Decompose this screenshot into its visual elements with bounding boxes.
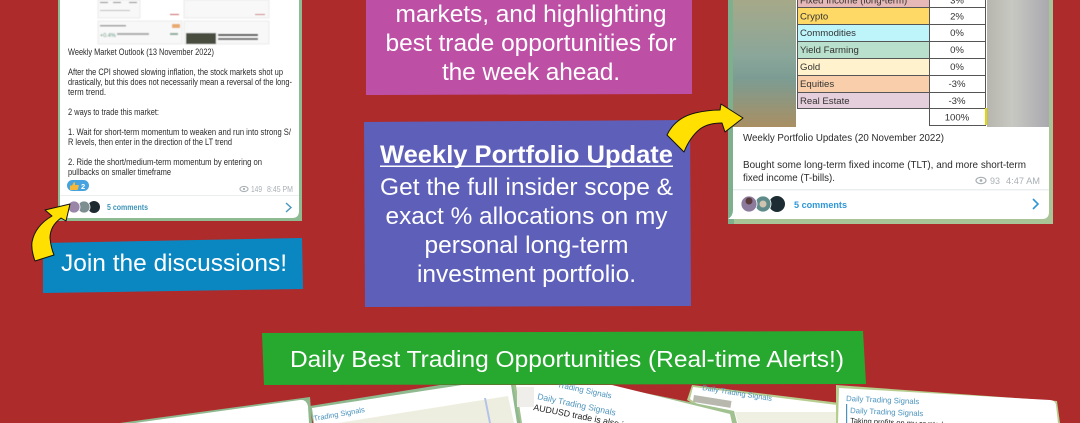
post text: fixed income (T-bills). xyxy=(743,173,835,184)
panel: signal screenshot 3 xyxy=(513,380,737,423)
view count: 93 xyxy=(990,176,1000,187)
allocation table: Real Estate xyxy=(800,96,850,107)
view count: 4:47 AM xyxy=(1006,176,1040,187)
post text: drastically, but this does not necessarily mean a reversal of the long- xyxy=(68,77,292,87)
post text xyxy=(743,133,1026,184)
body text: Get the full insider scope & xyxy=(380,174,673,201)
avatars xyxy=(741,196,785,212)
allocation table: 100% xyxy=(945,112,970,124)
allocation table: 0% xyxy=(950,28,964,39)
post text: pullbacks on smaller timeframe xyxy=(68,167,171,177)
post text: 2. Ride the short/medium-term momentum by entering on xyxy=(68,157,262,167)
post text: Weekly Portfolio Updates (20 November 2022) xyxy=(743,133,944,144)
allocation table: -3% xyxy=(948,79,966,90)
panel: weekly market update box xyxy=(366,0,692,95)
panel: weekly market update box: best trade opportunities for xyxy=(386,30,676,57)
allocation table: Equities xyxy=(800,79,834,90)
post text: Bought some long-term fixed income (TLT), and more short-term xyxy=(743,160,1026,171)
comments link: 5 comments xyxy=(794,200,847,211)
panel: weekly portfolio updates card xyxy=(728,0,1053,224)
view count: 8:45 PM xyxy=(267,184,293,194)
allocation table: 0% xyxy=(950,62,964,73)
allocation table: -3% xyxy=(948,96,966,107)
post text: Weekly Market Outlook (13 November 2022) xyxy=(68,47,214,57)
panel: signal screenshot 4: Daily Trading Signals xyxy=(702,383,773,403)
arrow: to portfolio card xyxy=(667,104,743,152)
panel: signal screenshot 5 xyxy=(836,385,1060,423)
chevron xyxy=(1033,199,1038,209)
blurred left image xyxy=(733,0,796,127)
reaction pill: 2 xyxy=(81,182,85,191)
panel: daily trading opportunities banner: Daily Best Trading Opportunities (Real-time Alerts!) xyxy=(290,346,844,372)
post text: After the CPI showed slowing inflation, the stock markets shot up xyxy=(68,67,283,77)
panel: signal screenshot 1 xyxy=(120,397,312,423)
body text: investment portfolio. xyxy=(417,261,636,288)
panel: signal screenshot 2: Trading Signals xyxy=(313,405,366,423)
panel: signal screenshot 2 xyxy=(310,385,520,423)
panel: daily trading opportunities banner xyxy=(262,331,866,385)
view count xyxy=(240,184,293,194)
body text xyxy=(380,174,673,288)
arrow: to comments xyxy=(32,204,70,261)
post text: 2 ways to trade this market: xyxy=(68,107,159,117)
reaction pill xyxy=(67,180,89,191)
allocation table: 2% xyxy=(950,12,964,22)
panel: weekly market update box: the week ahead. xyxy=(442,59,620,86)
allocation table: Yield Farming xyxy=(800,45,859,56)
panel: weekly market outlook card xyxy=(58,0,302,221)
allocation table: 0% xyxy=(950,45,964,56)
panel: signal screenshot 3: Trading Signals xyxy=(557,380,613,400)
comments link: 5 comments xyxy=(107,203,148,212)
panel: signal screenshot 3: Daily Trading Signals xyxy=(537,391,617,418)
heading: Weekly Portfolio Update xyxy=(380,141,673,169)
panel: signal screenshot 5: Daily Trading Signals xyxy=(850,406,924,418)
panel: join the discussions: Join the discussions! xyxy=(61,250,287,277)
panel: join the discussions xyxy=(43,238,303,293)
chart screenshot thumbnail: +0.4% xyxy=(100,33,116,39)
chevron xyxy=(286,203,291,212)
panel: signal screenshot 4 xyxy=(687,383,840,423)
body text: personal long-term xyxy=(424,232,628,259)
view count xyxy=(976,176,1040,187)
panel: weekly portfolio update box xyxy=(364,120,691,307)
chart screenshot thumbnail xyxy=(98,0,269,44)
view count: 149 xyxy=(251,184,262,194)
blurred right image xyxy=(987,0,1049,127)
allocation table: Commodities xyxy=(800,28,856,39)
post text: term trend. xyxy=(68,87,106,97)
panel: weekly market update box: markets, and highlighting xyxy=(396,1,666,28)
allocation table: Gold xyxy=(800,62,820,73)
panel: signal screenshot 5: Daily Trading Signals xyxy=(846,394,920,406)
post text: 1. Wait for short-term momentum to weaken and run into strong S/ xyxy=(68,127,291,137)
avatars xyxy=(68,201,100,213)
body text: exact % allocations on my xyxy=(386,203,668,230)
post text xyxy=(68,47,292,177)
allocation table: Crypto xyxy=(800,12,828,22)
allocation table xyxy=(797,0,987,126)
post text: R levels, then enter in the direction of the LT trend xyxy=(68,137,232,147)
